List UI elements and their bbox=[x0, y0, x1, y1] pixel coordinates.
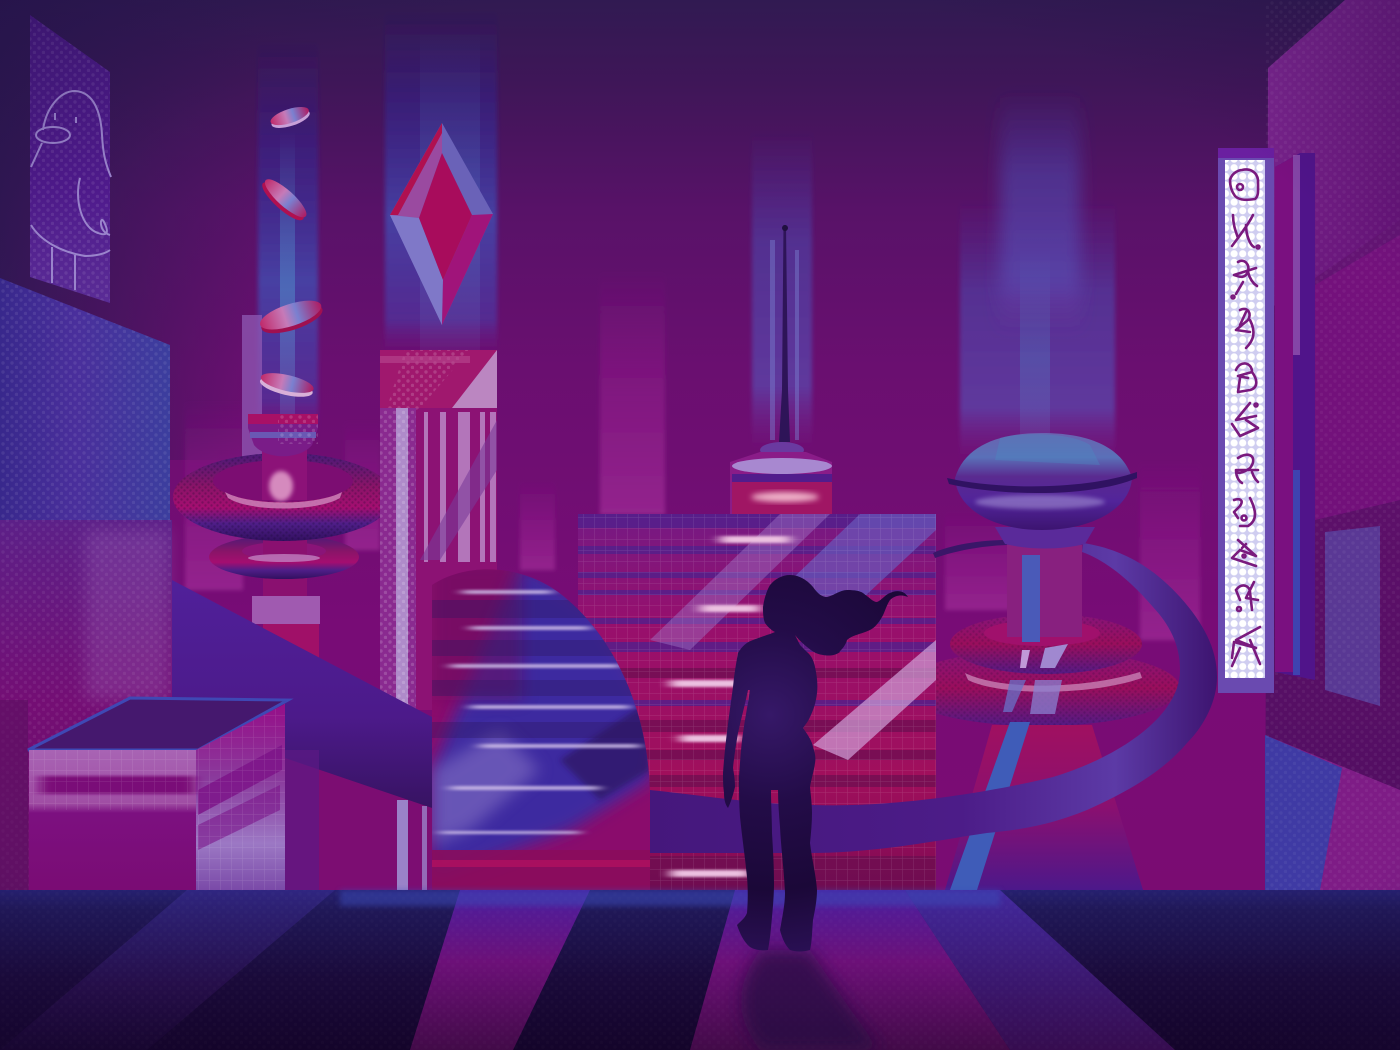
dome bbox=[955, 433, 1132, 530]
structure: dome tower right bbox=[947, 433, 1142, 674]
icon: floating coins bbox=[257, 103, 326, 401]
building: left blue block bbox=[0, 278, 172, 890]
building: wide striped tower bbox=[578, 514, 936, 890]
structure: ring tower left bbox=[173, 414, 393, 579]
upper ring bbox=[173, 448, 393, 541]
neon sign: vertical glowing panel bbox=[1218, 148, 1274, 693]
ring base: big lower torus bbox=[900, 650, 1180, 726]
building: striped pillar bbox=[380, 350, 497, 890]
ramp: diagonal slope bbox=[172, 580, 432, 808]
girl shadow on floor bbox=[741, 950, 880, 1050]
tower behind sign bbox=[1275, 153, 1315, 680]
upper ring bbox=[950, 614, 1142, 674]
icon: red diamond bbox=[390, 123, 493, 325]
blue stripe under torus bbox=[950, 722, 1030, 890]
icon: penguin outline bbox=[31, 91, 111, 290]
lower ring bbox=[209, 535, 359, 579]
panel: right wall bbox=[1265, 0, 1400, 890]
rim bbox=[947, 472, 1137, 493]
cup top bbox=[248, 414, 318, 456]
floor with light stripes bbox=[0, 890, 1400, 1050]
column bbox=[1007, 545, 1082, 642]
structure: antenna dome bbox=[730, 225, 832, 514]
icon: alien sign glyphs bbox=[1230, 169, 1260, 666]
building: base under ramp bbox=[285, 750, 432, 890]
building: cube front left bbox=[28, 698, 288, 890]
distant light beams bbox=[185, 10, 1200, 640]
floor fan under torus bbox=[945, 725, 1143, 890]
building: arch stairs bbox=[432, 560, 660, 890]
silhouette: girl with flowing hair bbox=[723, 575, 908, 952]
column under coins bbox=[242, 315, 320, 660]
structure: spiral road bbox=[650, 540, 1217, 853]
collar bbox=[995, 527, 1095, 548]
panel: penguin neon sign bbox=[30, 15, 111, 303]
